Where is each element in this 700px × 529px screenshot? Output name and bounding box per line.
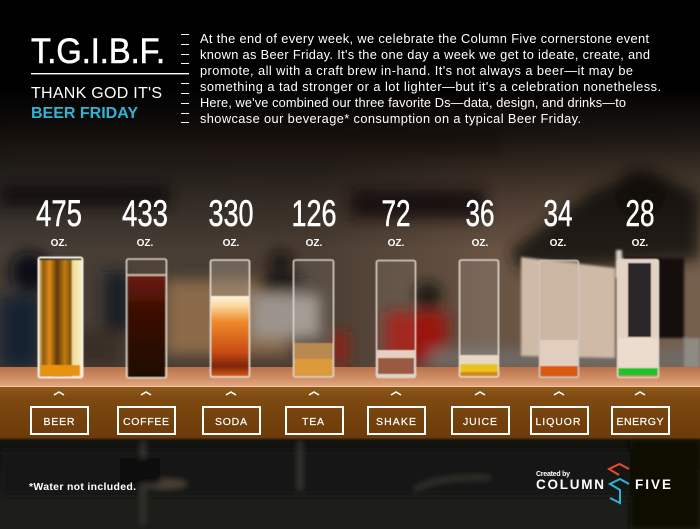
footnote: *Water not included.: [29, 481, 136, 493]
credit logo: Column Five: [536, 464, 671, 503]
category labels: TEA: [302, 416, 324, 428]
intro paragraph: Here, we've combined our three favorite Ds—data, design, and drinks—to: [200, 95, 626, 110]
unit labels: OZ.: [306, 238, 323, 249]
intro paragraph: promote, all with a craft brew in-hand. It's not always a beer—it may be: [200, 63, 633, 78]
credit logo: Column Five: FIVE: [635, 477, 671, 492]
intro paragraph: something a tad stronger or a lot lighter—but it's a celebration nonetheless.: [200, 79, 661, 94]
values in ounces: [36, 193, 654, 234]
unit labels: OZ.: [223, 238, 240, 249]
unit labels: OZ.: [550, 238, 567, 249]
unit labels: OZ.: [632, 238, 649, 249]
unit labels: OZ.: [137, 238, 154, 249]
glass: tea: [294, 260, 334, 377]
values in ounces: 28: [626, 193, 654, 234]
title: T.G.I.B.F.: [31, 32, 165, 71]
glass: coffee: [126, 259, 166, 378]
intro paragraph: [200, 31, 661, 126]
category labels: COFFEE: [123, 416, 169, 428]
category labels: [44, 416, 664, 428]
credit logo: Column Five: Created by: [536, 471, 570, 478]
intro paragraph: At the end of every week, we celebrate the Column Five cornerstone event: [200, 31, 649, 46]
values in ounces: 475: [36, 193, 82, 234]
subtitle: THANK GOD IT'S: [31, 85, 162, 102]
category labels: BEER: [44, 416, 75, 428]
glass: shake: [376, 260, 416, 378]
glass: energy: [618, 260, 658, 378]
unit labels: OZ.: [472, 238, 489, 249]
category labels: SHAKE: [376, 416, 416, 428]
intro paragraph: showcase our beverage* consumption on a typical Beer Friday.: [200, 111, 581, 126]
ruler divider: [31, 34, 189, 123]
glass: soda: [210, 260, 250, 377]
values in ounces: 126: [292, 193, 336, 234]
values in ounces: 330: [208, 193, 254, 234]
table: [0, 367, 700, 440]
values in ounces: 433: [122, 193, 168, 234]
carets: [54, 392, 645, 395]
category labels: ENERGY: [616, 416, 664, 428]
credit logo: Column Five: COLUMN: [536, 477, 604, 492]
unit labels: OZ.: [388, 238, 405, 249]
values in ounces: 72: [382, 193, 410, 234]
category label boxes: [31, 407, 669, 434]
glass: juice: [460, 260, 498, 377]
category labels: SODA: [215, 416, 247, 428]
intro paragraph: known as Beer Friday. It's the one day a week we get to ideate, create, and: [200, 47, 650, 62]
values in ounces: 34: [544, 193, 572, 234]
unit labels: OZ.: [51, 238, 68, 249]
category labels: LIQUOR: [536, 416, 581, 428]
highlighted subtitle: BEER FRIDAY: [31, 105, 138, 122]
logo mark: [609, 464, 629, 503]
unit labels: [51, 238, 649, 249]
heading block: [31, 32, 165, 122]
values in ounces: 36: [466, 193, 494, 234]
glass: liquor: [540, 260, 578, 378]
glass: beer: [38, 258, 82, 378]
category labels: JUICE: [463, 416, 497, 428]
